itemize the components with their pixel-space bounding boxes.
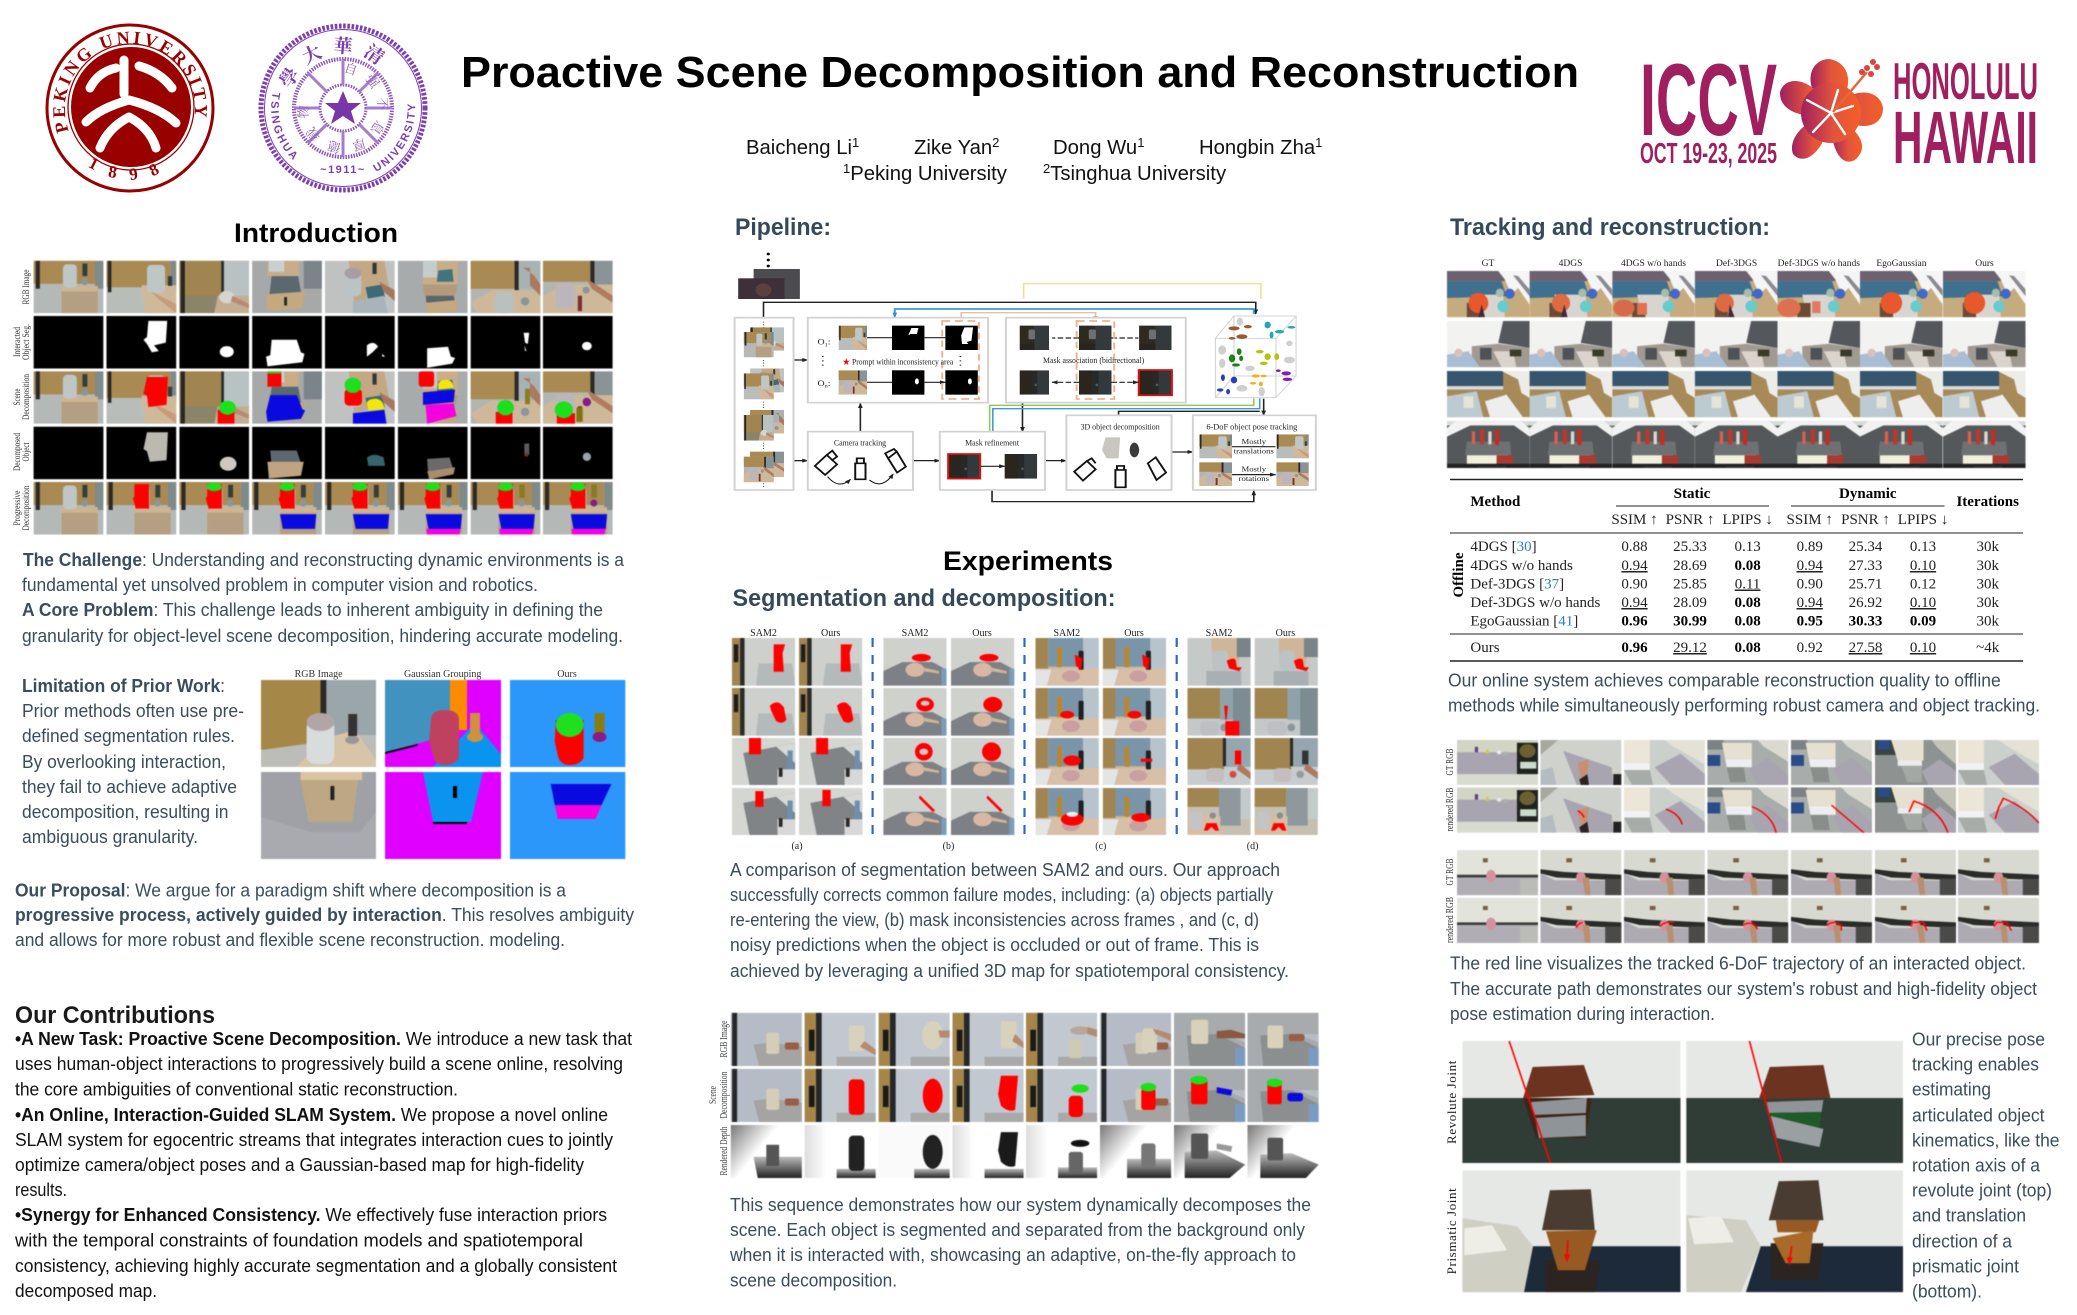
text block: contributions list: the core ambiguities of conventional static reconstruction. <box>15 1078 458 1100</box>
text block: joint estimation caption: direction of a <box>1912 1230 2013 1251</box>
text block: joint estimation caption: Our precise pose <box>1912 1029 2045 1050</box>
text block: limitation of prior work: they fail to achieve adaptive <box>22 776 237 797</box>
table row: EgoGaussian: 0.95 <box>1797 614 1823 630</box>
text block: sequence caption: This sequence demonstrates how our system dynamically decomposes the <box>730 1194 1311 1215</box>
text block: limitation of prior work: Limitation of Prior Work: <box>22 675 225 696</box>
text block: trajectory caption <box>1450 953 2038 1024</box>
table row: Def-3DGS w/o hands: 0.94 <box>1621 595 1648 611</box>
table row: Ours: 0.08 <box>1734 640 1761 656</box>
figure: SAM2 vs ours segmentation comparison <box>732 628 1318 852</box>
panel: input sequence <box>735 318 794 490</box>
table header: Iterations <box>1956 494 2019 510</box>
panel: 6-DoF object pose tracking: 6-DoF object pose tracking <box>1206 422 1298 431</box>
table row: 4DGS: 25.34 <box>1849 539 1883 555</box>
row labels: Rendered Depth <box>719 1126 730 1176</box>
column labels: Gaussian Grouping <box>404 669 481 680</box>
table row: Def-3DGS: 0.11 <box>1735 576 1760 592</box>
table row: Def-3DGS: 30k <box>1976 576 1999 592</box>
column labels: 4DGS w/o hands <box>1621 259 1686 269</box>
table row: Ours: ~4k <box>1976 640 2000 656</box>
text block: trajectory caption: pose estimation during interaction. <box>1450 1003 1715 1024</box>
heading: tracking and reconstruction: Tracking and reconstruction: <box>1450 214 1770 241</box>
text block: the challenge and core problem: fundamental yet unsolved problem in computer vision and robotics. <box>22 574 538 595</box>
row labels: rendered RGB <box>1445 897 1456 943</box>
table row: Ours: 0.10 <box>1910 640 1936 656</box>
text block: contributions list: SLAM system for egocentric streams that integrates interaction cues to jointly <box>15 1129 614 1150</box>
row labels: Decomposition <box>719 1072 730 1118</box>
text block: our proposal: Our Proposal: We argue for a paradigm shift where decomposition is a <box>15 880 567 901</box>
column labels: SAM2 <box>750 628 777 639</box>
table row: Def-3DGS w/o hands: 30k <box>1976 595 1999 611</box>
table row: Def-3DGS w/o hands: Def-3DGS w/o hands <box>1470 595 1601 611</box>
thumbnails <box>1457 740 2039 943</box>
heading: experiments: Experiments <box>943 546 1113 576</box>
row labels: Object Seg. <box>22 324 32 360</box>
text block: segmentation caption: A comparison of segmentation between SAM2 and ours. Our approach <box>730 859 1280 880</box>
dashed separators <box>873 638 1177 835</box>
text block: our proposal: and allows for more robust and flexible scene reconstruction. modeling. <box>15 929 565 950</box>
table header: PSNR ↑ <box>1666 512 1714 528</box>
text block: sequence caption: scene decomposition. <box>730 1270 897 1290</box>
row labels: Decomposed <box>13 433 23 471</box>
authors and affiliations: 1 <box>852 135 859 150</box>
table header: Static <box>1674 486 1711 502</box>
text block: joint estimation caption: prismatic joint <box>1912 1256 2020 1277</box>
row labels: Revolute Joint <box>1444 1060 1459 1144</box>
column labels: (a) <box>791 841 803 852</box>
panel: mask association <box>1006 318 1186 403</box>
table row: Def-3DGS w/o hands: 0.94 <box>1797 595 1823 611</box>
text block: contributions list <box>14 1028 633 1301</box>
panel: prompt within inconsistency area: ★ Prompt within inconsistency area <box>843 357 953 366</box>
figure: progressive decomposition grid <box>13 261 613 534</box>
panel: 6-DoF object pose tracking: Mostly <box>1241 438 1266 446</box>
text block: joint estimation caption: articulated object <box>1912 1105 2045 1126</box>
text block: limitation of prior work: defined segmentation rules. <box>22 725 235 746</box>
column labels: Def-3DGS <box>1716 258 1757 269</box>
row labels: Progressive <box>13 490 23 526</box>
panel: 6-DoF object pose tracking: rotations <box>1239 475 1269 483</box>
text block: contributions list: consistency, achieving highly accurate segmentation and a globally consistent <box>15 1255 618 1276</box>
table row: 4DGS w/o hands: 0.94 <box>1797 558 1823 574</box>
column labels: SAM2 <box>1206 628 1232 639</box>
table row: Ours <box>1470 640 2000 656</box>
text block: limitation of prior work: Prior methods often use pre- <box>22 700 244 721</box>
table row: 4DGS: 0.89 <box>1797 539 1823 555</box>
text block: the challenge and core problem: granularity for object-level scene decomposition, hindering accurate modeling. <box>22 625 623 646</box>
text block: segmentation caption: successfully corrects common failure modes, including: (a) objects partially <box>730 884 1274 905</box>
table row: Def-3DGS: 0.12 <box>1910 576 1936 592</box>
authors and affiliations: Hongbin Zha <box>1199 137 1315 159</box>
panel: mask association: Mask association (bidirectional) <box>1043 356 1144 365</box>
text block: joint estimation caption: rotation axis of a <box>1912 1155 2041 1176</box>
text block: segmentation caption: noisy predictions when the object is occluded or out of frame. This is <box>730 934 1259 955</box>
text block: contributions list: •An Online, Interaction-Guided SLAM System. We propose a novel online <box>15 1104 608 1125</box>
panel: prompt within inconsistency area <box>808 318 988 403</box>
row labels: Object <box>22 442 32 462</box>
panel: 3D object decomposition: 3D object decomposition <box>1081 422 1160 431</box>
row labels <box>1444 1060 1459 1274</box>
thumbnails <box>732 638 1318 835</box>
table row: Def-3DGS: 25.85 <box>1673 576 1707 592</box>
logo: ICCV Honolulu Hawaii <box>1640 43 2038 179</box>
table: quantitative results <box>1450 480 2023 661</box>
logo: Tsinghua University: TSINGHUA <box>271 93 297 160</box>
table row: Def-3DGS: Def-3DGS [37] <box>1470 576 1564 592</box>
icon: 3D Gaussian map cube <box>1215 316 1296 398</box>
table row: 4DGS w/o hands: 30k <box>1976 558 1999 574</box>
column labels: SAM2 <box>902 628 928 639</box>
figure: comparison with Gaussian Grouping <box>261 669 625 859</box>
table row: 4DGS w/o hands: 0.94 <box>1621 558 1648 574</box>
text block: limitation of prior work: decomposition, resulting in <box>22 801 228 822</box>
panel: prompt within inconsistency area: O <box>817 337 825 346</box>
text block: joint estimation caption: tracking enables <box>1912 1054 2039 1075</box>
table row: EgoGaussian: 30k <box>1976 614 1999 630</box>
text block: contributions list: results. <box>15 1179 67 1200</box>
panel: mask refinement <box>940 432 1045 490</box>
figure: articulated joint estimation <box>1444 1041 1903 1292</box>
logo: Tsinghua University: 學大華清 <box>278 36 386 86</box>
figure: decomposition sequence <box>708 1013 1319 1178</box>
text block: the challenge and core problem: The Challenge: Understanding and reconstructing dynamic environments is a <box>23 549 625 570</box>
text block: limitation of prior work: ambiguous granularity. <box>22 826 198 847</box>
text block: limitation of prior work <box>22 675 244 847</box>
column labels: Ours <box>557 669 577 680</box>
figure: reconstruction comparison <box>1447 258 2026 468</box>
text block: contributions list: with the temporal constraints of foundation models and spatiotemporal <box>14 1230 583 1250</box>
text block: joint estimation caption: kinematics, like the <box>1912 1130 2060 1151</box>
arrows: data flow <box>763 284 1264 502</box>
table row: EgoGaussian: 30.33 <box>1849 614 1882 630</box>
table row: 4DGS: 25.33 <box>1673 539 1707 555</box>
text block: contributions list: uses human-object interactions to progressively build a scene online, resolving <box>15 1053 623 1074</box>
text block: joint estimation caption: (bottom). <box>1912 1281 1982 1302</box>
text block: sequence caption: scene. Each object is segmented and separated from the background only <box>730 1219 1306 1240</box>
column labels: (d) <box>1247 841 1258 852</box>
column labels: 4DGS <box>1559 259 1582 269</box>
authors and affiliations: 2 <box>992 135 999 150</box>
text block: our proposal <box>15 880 635 950</box>
table row: 4DGS: 0.88 <box>1621 539 1648 555</box>
authors and affiliations: Tsinghua University <box>1050 163 1227 185</box>
table row: EgoGaussian: 30.99 <box>1673 614 1707 630</box>
table header: Method <box>1470 494 1521 510</box>
table row: Def-3DGS w/o hands: 0.08 <box>1734 595 1761 611</box>
panel: prompt within inconsistency area: : <box>828 337 831 346</box>
comparison panels <box>261 680 625 859</box>
column labels: Ours <box>972 628 992 639</box>
table row: 4DGS <box>1470 539 1999 555</box>
panel: prompt within inconsistency area: n <box>825 384 828 389</box>
row labels: GT RGB <box>1445 748 1456 776</box>
logo: ICCV Honolulu Hawaii: ICCV <box>1640 43 1777 157</box>
logo: Peking University <box>46 24 214 192</box>
text block: segmentation caption: achieved by leveraging a unified 3D map for spatiotemporal consistency. <box>730 960 1289 981</box>
thumbnails <box>34 261 613 534</box>
table row: 4DGS w/o hands: 0.08 <box>1734 558 1761 574</box>
text block: segmentation caption <box>730 859 1289 981</box>
table row: 4DGS: 4DGS [30] <box>1470 539 1537 555</box>
column labels: (b) <box>943 841 954 852</box>
heading: Introduction: Introduction <box>234 218 398 248</box>
column labels: SAM2 <box>1053 628 1080 639</box>
text block: limitation of prior work: By overlooking interaction, <box>22 751 226 772</box>
text block: table caption: methods while simultaneously performing robust camera and object tracking. <box>1448 695 2040 716</box>
table header: SSIM ↑ <box>1787 512 1833 528</box>
row labels <box>1445 748 1456 943</box>
authors and affiliations <box>746 135 1322 185</box>
table row: 4DGS w/o hands: 28.69 <box>1673 558 1707 574</box>
text block: segmentation caption: re-entering the view, (b) mask inconsistencies across frames , and (c, d) <box>730 909 1259 930</box>
table header: Dynamic <box>1839 486 1897 502</box>
text block: contributions list: •A New Task: Proactive Scene Decomposition. We introduce a new task that <box>15 1028 633 1049</box>
column labels: RGB Image <box>295 669 343 680</box>
table header <box>1451 486 2019 598</box>
column labels: Ours <box>821 628 841 639</box>
column labels <box>295 669 577 680</box>
column labels <box>750 628 1295 852</box>
text block: joint estimation caption: and translation <box>1912 1205 2026 1226</box>
panel: prompt within inconsistency area: O <box>817 379 825 388</box>
table row: Def-3DGS <box>1470 576 1999 592</box>
panel: 6-DoF object pose tracking <box>1193 415 1316 490</box>
table row: EgoGaussian <box>1470 614 1999 630</box>
table row: EgoGaussian: EgoGaussian [41] <box>1470 614 1578 630</box>
logo: ICCV Honolulu Hawaii: OCT 19-23, 2025 <box>1640 138 1777 170</box>
row labels: Decomposition <box>22 485 32 530</box>
table row: 4DGS w/o hands: 0.10 <box>1910 558 1936 574</box>
table row: EgoGaussian: 0.09 <box>1910 614 1936 630</box>
table row: Ours: 0.92 <box>1797 640 1823 656</box>
table row: 4DGS w/o hands: 4DGS w/o hands <box>1470 558 1573 574</box>
text block: joint estimation caption <box>1912 1029 2060 1302</box>
row labels: Scene <box>708 1086 719 1104</box>
row labels: RGB Image <box>719 1020 730 1058</box>
text block: trajectory caption: The red line visualizes the tracked 6-DoF trajectory of an interacted object. <box>1450 953 2026 974</box>
logo: Tsinghua University: ~1911~ <box>320 164 366 176</box>
panel: mask refinement: Mask refinement <box>965 438 1019 447</box>
logo: Tsinghua University <box>258 24 428 192</box>
table row: Def-3DGS w/o hands: 26.92 <box>1849 595 1882 611</box>
text block: sequence caption: when it is interacted with, showcasing an adaptive, on-the-fly approach to <box>729 1244 1296 1265</box>
column labels <box>1482 258 1994 269</box>
logo: Tsinghua University: UNIVERSITY <box>372 104 416 171</box>
logo: Tsinghua University: 自强不息厚德载物 <box>296 62 388 154</box>
table row: Def-3DGS: 0.90 <box>1621 576 1648 592</box>
row labels: GT RGB <box>1445 858 1456 886</box>
row labels: Scene <box>13 388 23 406</box>
table row: 4DGS w/o hands <box>1470 558 1999 574</box>
panel: camera tracking: Camera tracking <box>834 438 887 447</box>
text block: the challenge and core problem <box>22 549 625 646</box>
column labels: Ours <box>1975 259 1994 269</box>
panel: prompt within inconsistency area: 1 <box>825 343 828 348</box>
diagram: pipeline <box>735 253 1316 502</box>
table header: SSIM ↑ <box>1611 512 1658 528</box>
figure: 6-DoF trajectory visualization <box>1445 740 2039 943</box>
panel: 3D object decomposition <box>1066 415 1172 490</box>
panel: camera tracking <box>808 432 913 490</box>
row labels <box>13 270 32 530</box>
authors and affiliations: 1 <box>843 161 850 176</box>
authors and affiliations: 1 <box>1137 135 1144 150</box>
table row: Ours: Ours <box>1470 640 1500 656</box>
table row: 4DGS: 0.13 <box>1910 539 1936 555</box>
heading: segmentation and decomposition: Segmentation and decomposition: <box>732 585 1116 612</box>
text block: contributions list: •Synergy for Enhanced Consistency. We effectively fuse interaction priors <box>15 1204 607 1225</box>
text block: our proposal: progressive process, actively guided by interaction. This resolves ambiguity <box>15 904 635 925</box>
table header: Offline <box>1451 552 1467 598</box>
column labels: Def-3DGS w/o hands <box>1778 258 1860 269</box>
authors and affiliations: 2 <box>1043 161 1050 176</box>
heading: pipeline: Pipeline: <box>735 214 831 241</box>
table row: Def-3DGS: 25.71 <box>1849 576 1882 592</box>
table row: Def-3DGS w/o hands: 28.09 <box>1673 595 1707 611</box>
table row: EgoGaussian: 0.96 <box>1621 614 1648 630</box>
column labels: Ours <box>1276 628 1295 639</box>
table row: Def-3DGS w/o hands: 0.10 <box>1910 595 1936 611</box>
authors and affiliations: Baicheng Li <box>746 137 852 159</box>
row labels: Interacted <box>13 327 23 357</box>
text block: table caption: Our online system achieves comparable reconstruction quality to offline <box>1448 670 2001 690</box>
column labels: EgoGaussian <box>1876 259 1927 269</box>
text block: contributions list: decomposed map. <box>15 1280 157 1301</box>
table header: PSNR ↑ <box>1841 512 1890 528</box>
table row: Ours: 29.12 <box>1673 640 1707 656</box>
text block: the challenge and core problem: A Core Problem: This challenge leads to inherent ambiguity in defining the <box>22 599 603 620</box>
input video frames <box>738 253 800 299</box>
text block: joint estimation caption: revolute joint (top) <box>1912 1180 2052 1201</box>
table header: LPIPS ↓ <box>1898 512 1948 528</box>
column labels: (c) <box>1095 841 1106 852</box>
table row: 4DGS: 0.13 <box>1734 539 1761 555</box>
logo: Peking University: 1898 <box>88 158 159 180</box>
title: Proactive Scene Decomposition and Reconstruction <box>461 48 1579 97</box>
text block: trajectory caption: The accurate path demonstrates our system's robust and high-fidelity object <box>1450 978 2038 999</box>
authors and affiliations: Zike Yan <box>914 137 992 159</box>
panel: 6-DoF object pose tracking: translations <box>1234 447 1274 455</box>
row labels <box>708 1020 730 1176</box>
table row: Ours: 27.58 <box>1849 640 1882 656</box>
table header: LPIPS ↓ <box>1722 512 1773 528</box>
panel: prompt within inconsistency area: : <box>828 379 831 388</box>
row labels: Decomposition <box>22 374 32 420</box>
row labels: RGB Image <box>22 270 32 304</box>
thumbnails <box>1462 1041 1903 1292</box>
panel: 6-DoF object pose tracking: Mostly <box>1241 465 1266 473</box>
authors and affiliations: Peking University <box>850 163 1008 185</box>
column labels: Ours <box>1124 628 1144 639</box>
table row: 4DGS w/o hands: 27.33 <box>1849 558 1882 574</box>
text block: joint estimation caption: estimating <box>1912 1079 1991 1100</box>
logo: Peking University: PEKING UNIVERSITY <box>53 32 208 134</box>
table row: 4DGS: 30k <box>1976 539 1999 555</box>
table row: Def-3DGS w/o hands <box>1470 595 1999 611</box>
authors and affiliations: 1 <box>1315 135 1322 150</box>
table row: EgoGaussian: 0.08 <box>1734 614 1761 630</box>
text block: sequence caption <box>729 1194 1311 1290</box>
thumbnails <box>1447 271 2026 468</box>
authors and affiliations: Dong Wu <box>1053 137 1137 159</box>
row labels: rendered RGB <box>1445 787 1456 832</box>
column labels: GT <box>1482 259 1495 269</box>
heading: our contributions: Our Contributions <box>15 1002 215 1029</box>
row labels: Prismatic Joint <box>1444 1188 1459 1274</box>
table row: Def-3DGS: 0.90 <box>1797 576 1823 592</box>
thumbnails <box>731 1013 1319 1178</box>
text block: table caption <box>1448 670 2040 716</box>
text block: contributions list: optimize camera/object poses and a Gaussian-based map for high-fidelity <box>15 1154 585 1175</box>
table row: Ours: 0.96 <box>1621 640 1648 656</box>
